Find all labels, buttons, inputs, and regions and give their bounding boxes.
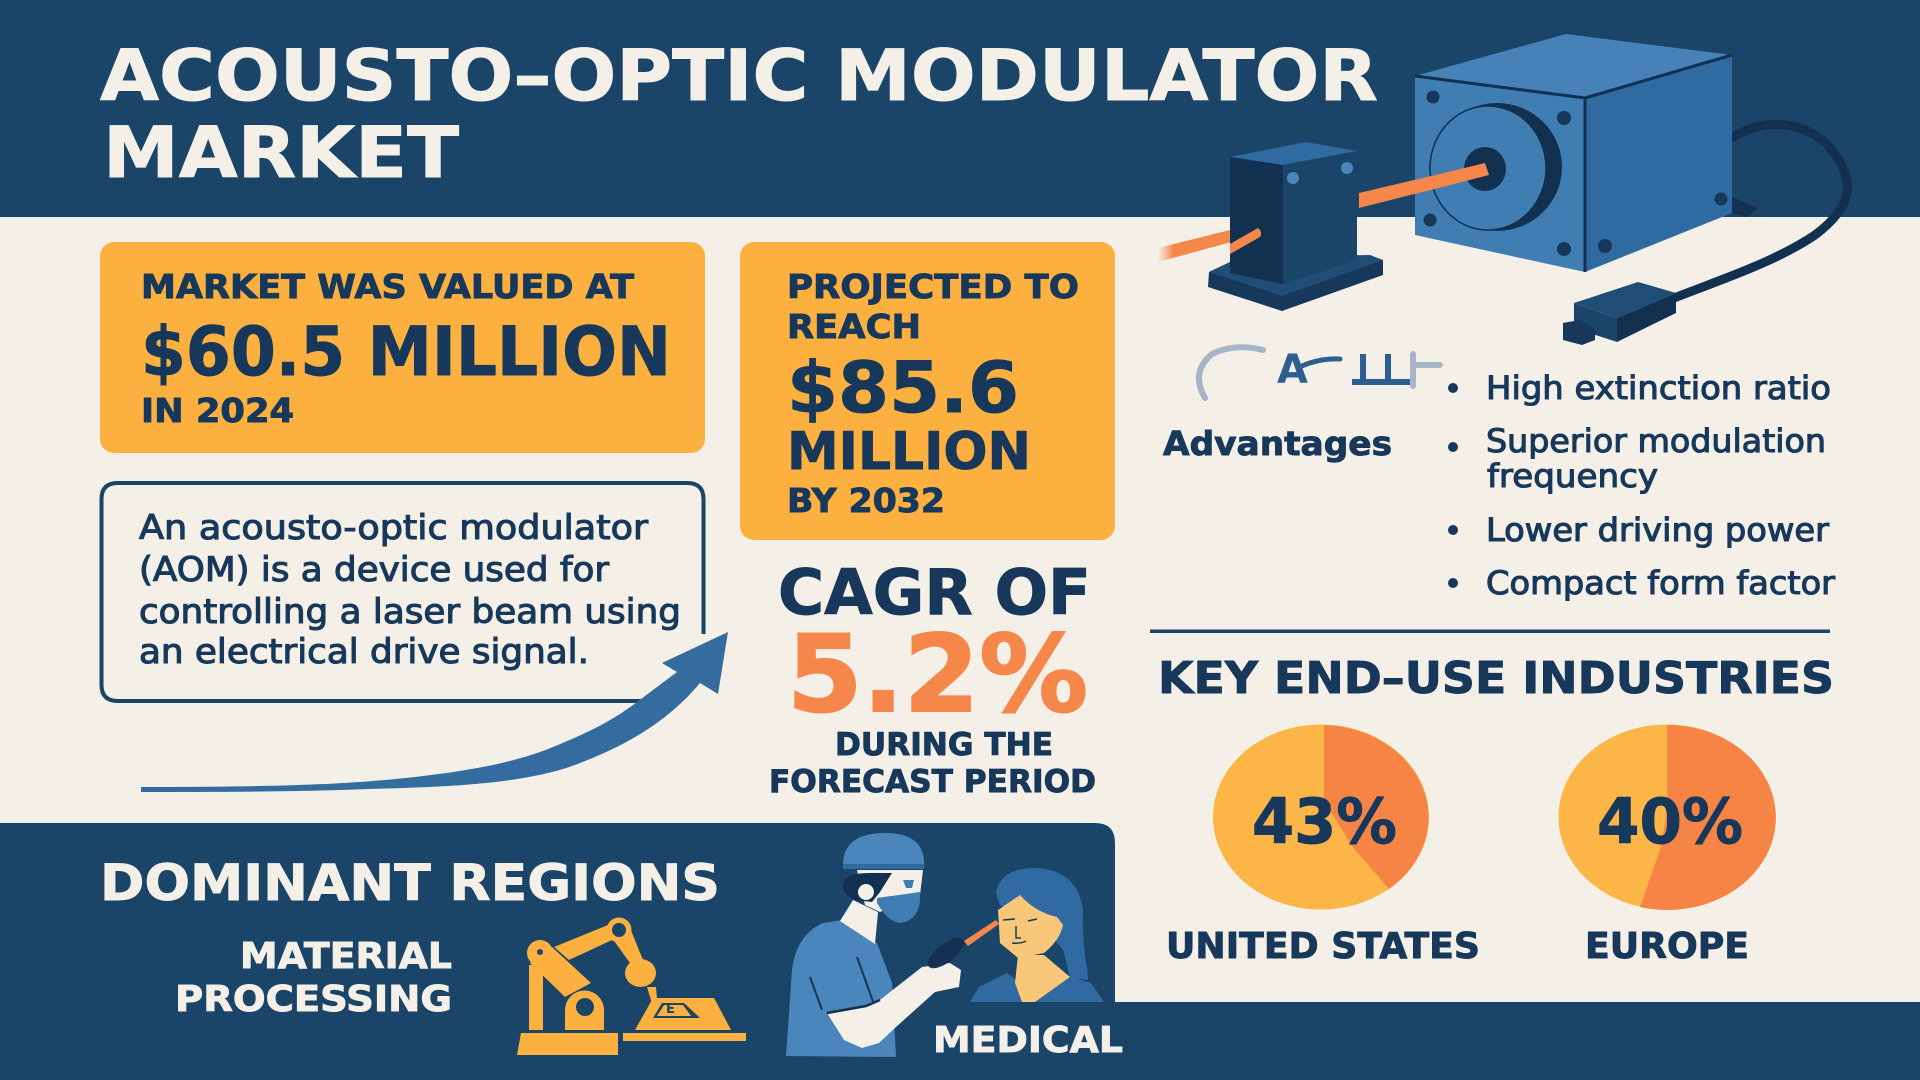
label: material processing <box>175 936 452 1020</box>
panel: market value 2024: IN 2024 <box>141 391 294 430</box>
beam: output <box>1359 163 1489 208</box>
panel: description: an electrical drive signal. <box>139 632 589 672</box>
illustration: patient <box>970 868 1104 1002</box>
beam: input to hub <box>1415 163 1489 194</box>
label: material processing: PROCESSING <box>175 979 452 1020</box>
panel: projected value 2032: PROJECTED TO <box>787 267 1079 306</box>
heading: advantages: Advantages <box>1163 424 1392 463</box>
chart: europe pie: EUROPE <box>1585 926 1749 967</box>
panel: description <box>102 483 704 701</box>
list: advantages: High extinction ratio <box>1486 369 1831 407</box>
header band <box>0 0 1920 217</box>
list: advantages <box>1448 369 1836 602</box>
panel: description: controlling a laser beam using <box>139 592 681 632</box>
arrow: growth <box>141 632 728 792</box>
icon: robot arm: E <box>666 1002 675 1017</box>
illustration: doctor <box>786 833 999 1057</box>
connector <box>1574 282 1676 318</box>
icon: garbled advantages glyphs: A <box>1277 347 1308 393</box>
CAGR block: FORECAST PERIOD <box>769 764 1096 800</box>
cube body <box>1415 34 1732 98</box>
illustration: AOM device <box>1158 34 1848 345</box>
icon: robot arm <box>517 918 746 1055</box>
panel: description: An acousto-optic modulator <box>139 508 648 548</box>
icon: garbled advantages glyphs <box>1199 347 1440 398</box>
chart: europe pie: 40% <box>1597 785 1743 858</box>
chart: united states pie: UNITED STATES <box>1166 926 1480 967</box>
list: advantages: Compact form factor <box>1486 564 1836 602</box>
panel: market value 2024: MARKET WAS VALUED AT <box>141 267 635 306</box>
list: advantages: frequency <box>1487 457 1658 495</box>
small block <box>1230 142 1357 165</box>
panel: projected value 2032: BY 2032 <box>787 481 945 520</box>
CAGR block <box>769 556 1096 800</box>
title: ACOUSTO–OPTIC MODULATOR <box>100 35 1378 117</box>
title <box>100 35 1378 194</box>
CAGR block: 5.2% <box>787 613 1088 736</box>
label: material processing: MATERIAL <box>240 936 452 977</box>
title: MARKET <box>103 112 459 194</box>
panel: market value 2024: $60.5 MILLION <box>141 313 671 392</box>
list: advantages: Lower driving power <box>1486 511 1830 549</box>
chart: united states pie: 43% <box>1252 785 1397 858</box>
beam: input <box>1158 223 1262 262</box>
list: advantages: Superior modulation <box>1486 422 1826 460</box>
CAGR block: DURING THE <box>835 727 1053 763</box>
small block base <box>1208 255 1383 311</box>
panel: description: (AOM) is a device used for <box>139 550 609 590</box>
panel: projected value 2032 <box>740 242 1115 540</box>
bottom band <box>0 823 1920 1080</box>
chart: united states pie <box>1166 724 1480 967</box>
cable <box>1674 124 1848 298</box>
label: medical: MEDICAL <box>933 1020 1123 1061</box>
chart: europe pie <box>1558 724 1776 967</box>
panel: market value 2024 <box>100 242 705 453</box>
panel: projected value 2032: REACH <box>787 307 921 346</box>
heading: dominant regions: DOMINANT REGIONS <box>100 854 720 912</box>
heading: key end-use industries: KEY END–USE INDUSTRIES <box>1158 653 1834 704</box>
CAGR block: CAGR OF <box>778 556 1091 629</box>
panel: projected value 2032: $85.6 <box>787 347 1019 429</box>
panel: projected value 2032: MILLION <box>787 422 1031 482</box>
